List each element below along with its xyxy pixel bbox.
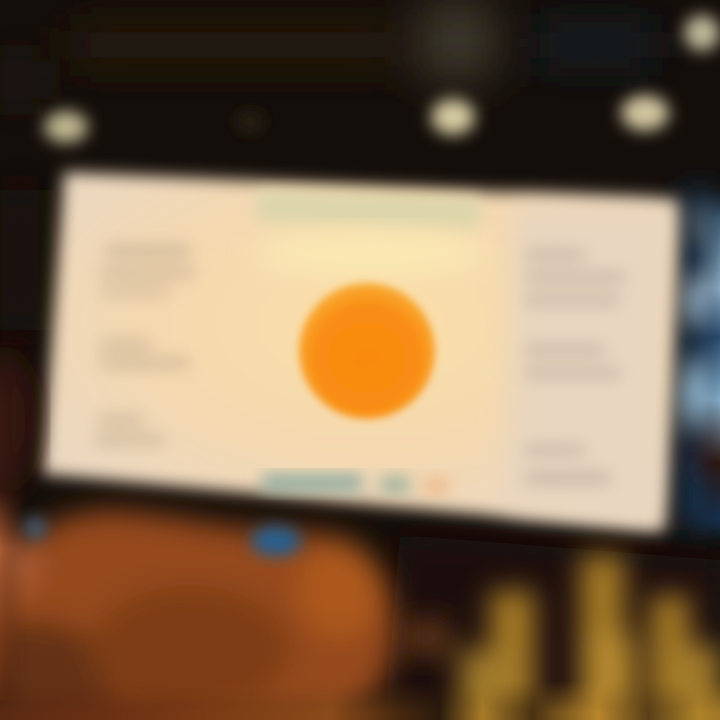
right edge colour strip <box>696 195 720 536</box>
title band <box>256 190 480 230</box>
bright band under title <box>255 234 485 274</box>
presentation screen <box>42 172 678 532</box>
bottom edge colour strip <box>0 680 720 720</box>
right column shade <box>505 205 668 522</box>
bottom caption <box>262 474 448 494</box>
orange circle <box>299 283 435 419</box>
right text blocks <box>525 250 625 484</box>
yellow bottles <box>405 555 720 720</box>
hair at left edge <box>0 340 36 500</box>
left text blocks <box>95 245 195 445</box>
ceiling lights <box>44 15 720 143</box>
ceiling details <box>0 0 655 330</box>
right side blue video wall <box>678 190 720 530</box>
screen panel <box>42 172 678 532</box>
dark lower room <box>385 535 720 720</box>
blue object above hand <box>24 517 301 556</box>
left edge colour strip <box>0 366 22 700</box>
foreground hand <box>0 510 395 720</box>
